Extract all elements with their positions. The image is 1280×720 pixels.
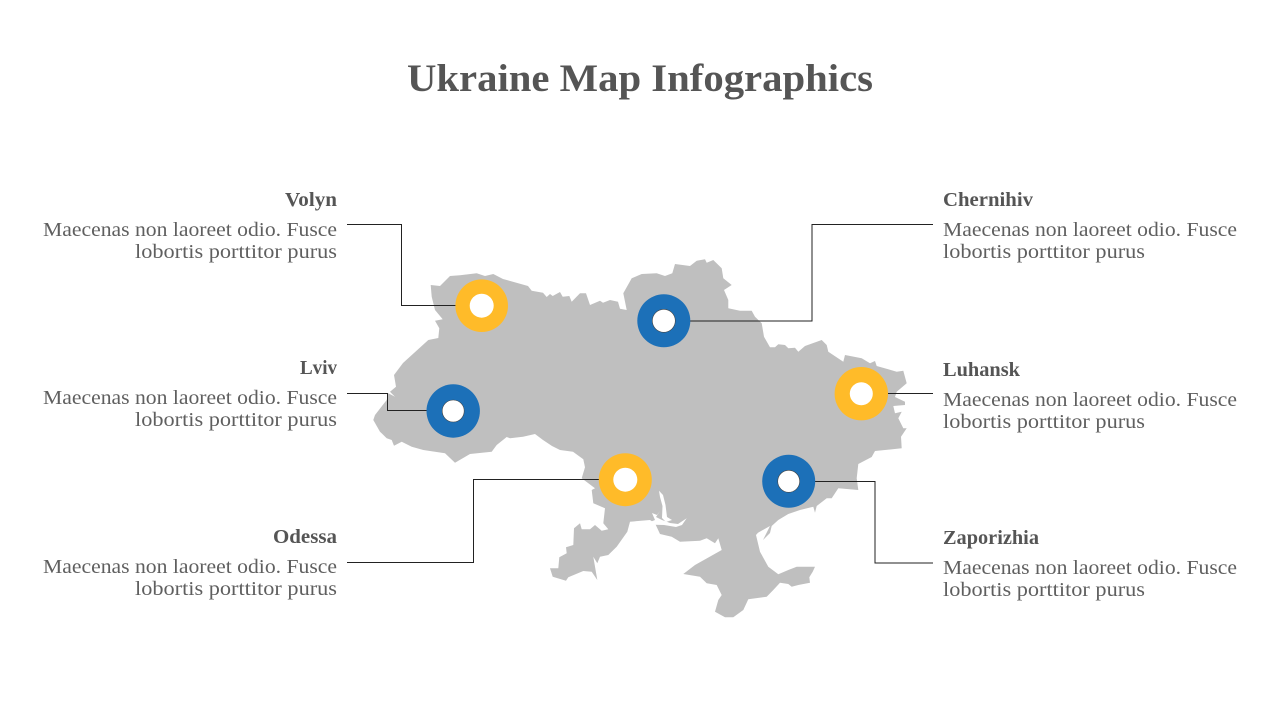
label: Zaporizhia: Zaporizhia (943, 527, 1039, 549)
connector: Luhansk (887, 392, 933, 394)
connector: Volyn (347, 224, 457, 306)
label: Zaporizhia (943, 527, 1237, 601)
label: Zaporizhia: lobortis porttitor purus (943, 579, 1145, 601)
marker: Odessa (599, 453, 652, 506)
label: Lviv: Lviv (300, 357, 338, 379)
label: Luhansk: lobortis porttitor purus (943, 411, 1145, 433)
marker: Lviv (426, 384, 480, 438)
label: Lviv: Maecenas non laoreet odio. Fusce (43, 387, 337, 409)
label: Chernihiv (943, 189, 1237, 263)
marker: Volyn (455, 279, 508, 332)
label: Odessa: Maecenas non laoreet odio. Fusce (43, 556, 337, 578)
label: Volyn (43, 189, 338, 263)
label: Luhansk: Luhansk (943, 359, 1021, 381)
label: Odessa (43, 526, 337, 600)
label: Lviv (43, 357, 338, 431)
connector: Zaporizhia (814, 482, 933, 563)
label: Chernihiv: lobortis porttitor purus (943, 241, 1145, 263)
label: Volyn: Maecenas non laoreet odio. Fusce (43, 219, 337, 241)
connector: Chernihiv (689, 224, 933, 321)
map: Ukraine (373, 259, 907, 617)
label: Luhansk (943, 359, 1237, 433)
label: Lviv: lobortis porttitor purus (135, 409, 337, 431)
marker: Chernihiv (637, 294, 690, 347)
marker: Zaporizhia (762, 455, 815, 508)
label: Chernihiv: Maecenas non laoreet odio. Fusce (943, 219, 1237, 241)
connector: Lviv (347, 394, 428, 410)
label: Odessa: Odessa (273, 526, 337, 548)
label: Zaporizhia: Maecenas non laoreet odio. Fusce (943, 557, 1237, 579)
label: Volyn: Volyn (285, 189, 338, 211)
label: Odessa: lobortis porttitor purus (135, 578, 337, 600)
label: Luhansk: Maecenas non laoreet odio. Fusce (943, 389, 1237, 411)
marker: Luhansk (835, 367, 888, 420)
connector: Odessa (347, 480, 600, 562)
label: Chernihiv: Chernihiv (943, 189, 1034, 211)
label: Volyn: lobortis porttitor purus (135, 241, 337, 263)
title: Ukraine Map Infographics (407, 57, 873, 100)
